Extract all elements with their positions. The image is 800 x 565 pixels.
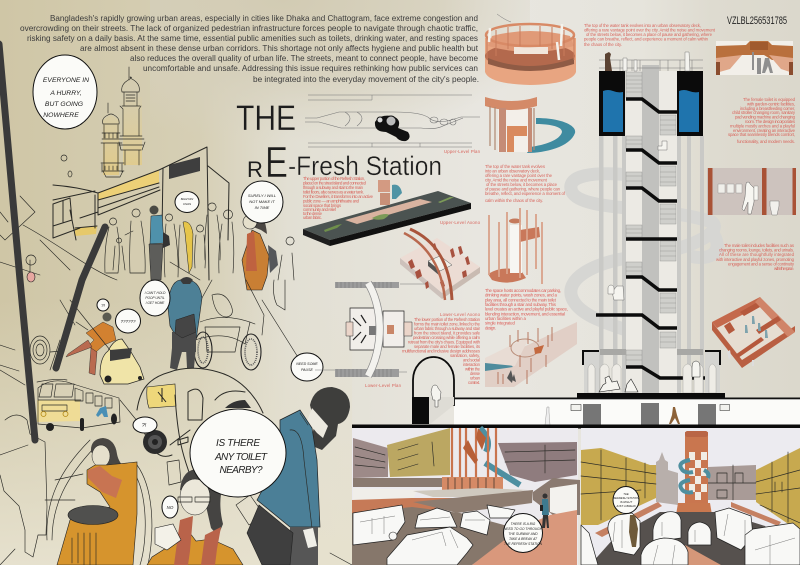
figure: running man in orange — [60, 300, 116, 375]
bubble: everyone in a hurry — [33, 55, 97, 129]
text: lower portion: multifunctional and inclusive design addresses — [402, 348, 480, 354]
text: upper portion: The upper portion of the Refresh Station, — [303, 176, 365, 181]
text: upper portion: to the dense — [303, 211, 323, 216]
text: upper portion: placed on the street island and connected — [303, 180, 367, 186]
iso: male toilet plan — [712, 297, 795, 368]
image: washroom panel — [707, 168, 796, 215]
tower base — [577, 393, 725, 399]
title: R — [247, 157, 263, 182]
columns — [599, 65, 704, 393]
bubble: question marks — [116, 309, 140, 333]
text: upper portion: urban fabric. — [303, 215, 322, 220]
tanks — [599, 71, 625, 136]
cars — [353, 505, 515, 565]
text: female toilet: including a breastfeeding corner, — [740, 106, 795, 111]
yellow car — [100, 339, 144, 384]
black stepped floors — [596, 99, 705, 378]
text: top of tank (top) — [584, 23, 716, 47]
text: lower portion: urban — [470, 376, 481, 380]
bubble: is there any toilet nearby: NEARBY? — [220, 465, 263, 476]
text: lower portion: dense — [470, 371, 481, 376]
text: male toilet: changing rooms, lounge, toilets, and urinals. — [719, 248, 794, 253]
stairs — [626, 72, 676, 366]
text: top of tank (mid column) — [485, 164, 566, 203]
intro text block: risking safety on a daily basis. At the same time, essential public amenities such as toilets, drinking water, and resting spaces — [27, 33, 478, 43]
intro text block: Bangladesh's rapidly growing urban areas, especially in cities like Dhaka and Chattogram, face extreme congestion and — [50, 13, 478, 23]
intro text block: overcrowding on their streets. The lack of organized pedestrian infrastructure forces people to navigate through chaotic traffic, — [20, 23, 478, 33]
figure: woman in orange saree — [57, 438, 137, 565]
text: lower portion: pedestrian crossing while offering a calm — [413, 335, 480, 340]
text: lower portion: context. — [468, 380, 480, 385]
text: female toilet: space that seamlessly blends comfort, — [728, 132, 795, 137]
scene: water tower street view — [581, 428, 800, 565]
intro text block — [20, 13, 479, 84]
text: upper portion: social space that brings — [303, 203, 341, 208]
bubble: everyone in a hurry: EVERYONE IN — [43, 77, 89, 84]
text: female toilet: environment, creating an interactive — [733, 128, 796, 133]
label: upper level axono: Upper-Level Axono — [440, 220, 481, 225]
text: upper portion: For the Dwellers, it transforms into an active — [303, 194, 374, 199]
label: upper level plan: Upper-Level Plan — [444, 149, 481, 154]
figure: outline person on left — [0, 415, 47, 557]
text: top of tank (top): the chaos of the city. — [584, 42, 622, 47]
label: lower level axono: Lower-Level Axono — [440, 312, 481, 317]
bubble: scene one: NEED TO GO THROUGH — [504, 527, 543, 531]
text: space level: blending interaction, movement, and essential — [485, 311, 565, 316]
figure: man seen from behind with satchel — [168, 277, 202, 370]
text: lower portion: within the — [465, 366, 481, 372]
text: upper portion: through a subway and stair to the main — [303, 185, 364, 190]
text: lower portion: retreat from the city's chaos. Equipped with — [408, 340, 481, 344]
text: top of tank (top): The top of the water tank evolves into an urban observatory deck, — [584, 23, 701, 28]
intro text block: uncomfortable and unsafe. Addressing this issue requires rethinking how public services can — [143, 63, 478, 73]
bubble: need some pause: PAUSE — [301, 368, 314, 372]
road — [590, 512, 800, 565]
scene: subway entrance view — [352, 428, 580, 565]
lower level axonometric — [400, 229, 480, 300]
text: top of tank (top): people can breathe, reflect, and experience a moment of calm within — [584, 36, 709, 42]
bubble: scene two: IS RIGHT — [620, 500, 632, 504]
text: upper portion: community and relief — [303, 207, 337, 212]
vehicles — [581, 508, 800, 565]
bubble: can't hold — [140, 280, 170, 316]
title — [236, 99, 442, 187]
text: female toilet: child stroller changing room, sanitary — [732, 110, 796, 115]
text: lower portion — [402, 317, 481, 385]
text: space level: play area, all connected to the main toilet — [485, 297, 557, 302]
title: E — [265, 138, 288, 187]
bubble: can't hold: I GET HOME — [146, 301, 165, 305]
vertical poles — [0, 44, 105, 440]
text: male toilet: with interactive and playful zones, promoting — [716, 257, 795, 262]
text: lower portion: interaction — [463, 362, 481, 367]
figure: large man with blue jacket and bag — [247, 387, 350, 565]
text: female toilet: The female toilet is equipped — [743, 97, 796, 102]
text: lower portion: urban fabric through a subway and stair — [414, 326, 481, 331]
bubble: no: NO — [167, 505, 174, 510]
text: top of tank (mid column): The top of the water tank evolves — [485, 164, 545, 169]
text: lower portion: from the street island. It provides safe — [414, 330, 481, 336]
man standing — [540, 494, 549, 528]
auto rickshaw — [120, 368, 264, 525]
bubble: surely: IN TIME — [255, 205, 270, 210]
bubble: bhaiyan — [175, 192, 199, 212]
bubble: is there any toilet nearby: IS THERE — [216, 438, 260, 449]
bubble: is there any toilet nearby — [190, 409, 286, 497]
text: female toilet — [728, 97, 796, 144]
text: female toilet: pad vending machine and changing — [735, 115, 796, 120]
text: top of tank (mid column): of pause and gathering, where people can — [485, 186, 561, 192]
text: lower portion: The lower portion of the Refresh Station — [414, 317, 481, 322]
crowd outlines — [105, 203, 294, 280]
rickshaw — [193, 280, 306, 370]
bubble: scene one: THERE IS A BIG — [511, 522, 536, 526]
text: top of tank (top): offering a rare vantage point over the city. Amid the noise and movement — [584, 28, 716, 32]
bubble: scene one: TAKE A BREAK AT — [509, 537, 538, 541]
upper level plan — [305, 95, 480, 147]
minarets — [101, 67, 145, 177]
text: male toilet: The male toilet includes facilities such as — [724, 243, 794, 248]
text: lower portion: and social — [463, 358, 480, 362]
bubble: scene two — [613, 486, 640, 514]
text: space level: single integrated — [485, 321, 516, 326]
tower interior — [626, 71, 677, 393]
bubble: bhaiyan: UNAS — [183, 202, 191, 206]
text: space level: design. — [485, 325, 496, 330]
title: THE — [236, 99, 296, 138]
bubble: everyone in a hurry: BUT GOING — [45, 101, 83, 108]
bubble: auto question — [133, 417, 157, 433]
bubble: scene two: REFRESH STATION — [613, 496, 640, 500]
text: space level: facilities through a stair and subway. This — [485, 302, 557, 307]
text: space level: urban facilities within a — [485, 316, 527, 321]
bubble: auto question: ?! — [142, 423, 147, 429]
text: male toilet: within the space. — [774, 266, 794, 271]
curved motion lines — [0, 440, 352, 565]
figure: woman in orange coat — [242, 212, 278, 290]
slide spiral — [571, 174, 717, 335]
lower level plan — [315, 282, 425, 377]
intro text block: be integrated into the everyday movement of the city's people. — [253, 74, 479, 84]
text: space level — [485, 288, 568, 330]
text: female toilet: with garden-centric facilities, — [747, 101, 795, 106]
figure: man in blue jacket, crowd — [149, 206, 170, 280]
text: top of tank (mid column): of the streets below, it becomes a place — [486, 182, 558, 187]
bus — [37, 379, 120, 431]
bubble: small question: ?! — [101, 303, 106, 308]
bubble: can't hold: POOP UNTIL — [145, 296, 165, 300]
text: female toilet: room. The design incorporates — [745, 119, 795, 124]
text: male toilet — [716, 243, 795, 271]
text: lower portion: sanitation, safety, — [450, 353, 480, 358]
section tower — [571, 52, 725, 399]
text: upper portion: public zone — an amphitheatre and — [303, 198, 360, 204]
text: female toilet: multiple mostly arches and a playful — [730, 123, 795, 128]
upper level axonometric slab — [303, 180, 471, 246]
ground bands — [352, 498, 462, 518]
text: top of tank (mid column): offering a rare vantage point over the — [485, 173, 553, 178]
bubble: scene one: THE SUBWAY AND — [508, 532, 538, 536]
intro text block: are almost absent in these dense urban corridors. This shortage not only affects hygiene and public health but — [80, 43, 479, 53]
bubble: surely: SURELY I WILL — [248, 193, 276, 198]
water tower — [676, 431, 712, 515]
label: lower level plan: Lower-Level Plan — [365, 383, 402, 388]
bubble: everyone in a hurry: NOWHERE — [43, 112, 79, 119]
tower legs and slide — [413, 428, 528, 497]
intro text block: also reduces the overall quality of urban life. The streets, meant to connect people, have become — [130, 53, 478, 63]
text: top of tank (mid column): calm within the chaos of the city. — [485, 198, 543, 203]
bubble: scene two: THE — [623, 492, 629, 496]
building with yellow awning — [0, 147, 229, 282]
bubble: can't hold: I CAN'T HOLD — [145, 291, 166, 295]
street illustration — [0, 44, 352, 565]
text: top of tank (mid column): city. Amid the noise and movement — [485, 178, 548, 182]
text: space level: level creates an active and playful public space, — [485, 307, 568, 312]
text: upper portion: toilet floors, also serves as a water tank. — [303, 190, 364, 194]
text: space level: drinking water points, wash zones, and a — [485, 293, 558, 298]
iso: observation ring — [485, 14, 576, 85]
ground arcade — [583, 351, 720, 393]
speech bubbles — [33, 55, 323, 518]
text: female toilet: functionality, and modern needs. — [737, 139, 795, 144]
bubble: need some pause — [291, 353, 323, 381]
text: male toilet: engagement and a sense of continuity — [728, 261, 795, 266]
bubble: scene two: JUST A BREAK — [616, 504, 636, 508]
bubble: is there any toilet nearby: ANY TOILET — [214, 452, 268, 463]
text: upper portion — [303, 176, 374, 220]
bubble: everyone in a hurry: A HURRY, — [49, 90, 82, 97]
bubble: scene one — [504, 514, 543, 552]
text: top of tank (mid column): breathe, reflect, and experience a moment of — [485, 191, 566, 196]
text: space level: The space hosts accommodates car parking, — [485, 288, 561, 293]
people on roof and floors — [605, 52, 690, 300]
bubble: scene one: THE REFRESH STATION — [504, 542, 543, 546]
wheel — [0, 300, 110, 385]
text: lower portion: separate male and female facilities, its — [414, 344, 480, 349]
bubble: question marks: ?????? — [120, 319, 136, 324]
bubble: need some pause: NEED SOME — [296, 362, 318, 366]
text: lower portion: forms the main toilet zone, linked to the — [414, 322, 481, 326]
title: -Fresh Station — [288, 151, 442, 181]
iso: water tower with slide — [485, 97, 575, 153]
railing — [599, 60, 703, 71]
image: female toilet perspective — [716, 41, 793, 75]
bubble: surely: NOT MAKE IT — [249, 199, 275, 204]
iso: stick structure — [488, 208, 542, 284]
figure: woman with glasses — [147, 469, 243, 565]
bubble: bhaiyan: BHAIYAN — [181, 197, 194, 201]
bubble: no — [162, 496, 178, 518]
bubble: small question — [97, 299, 109, 311]
road and pavement — [352, 507, 522, 565]
text: male toilet: All of these are thoughtfully integrated — [719, 252, 795, 257]
arch entrance — [412, 357, 454, 425]
iso: lower axon with blue strip — [485, 322, 577, 387]
subway doors and signs — [545, 403, 730, 425]
bubble: surely — [241, 181, 283, 223]
band strip — [353, 478, 447, 487]
subway corridor — [412, 357, 800, 425]
text: top of tank (mid column): into an urban observatory deck, — [485, 168, 540, 174]
text: top of tank (top): of the streets below, it becomes a place of pause and gathering, where — [586, 32, 713, 37]
